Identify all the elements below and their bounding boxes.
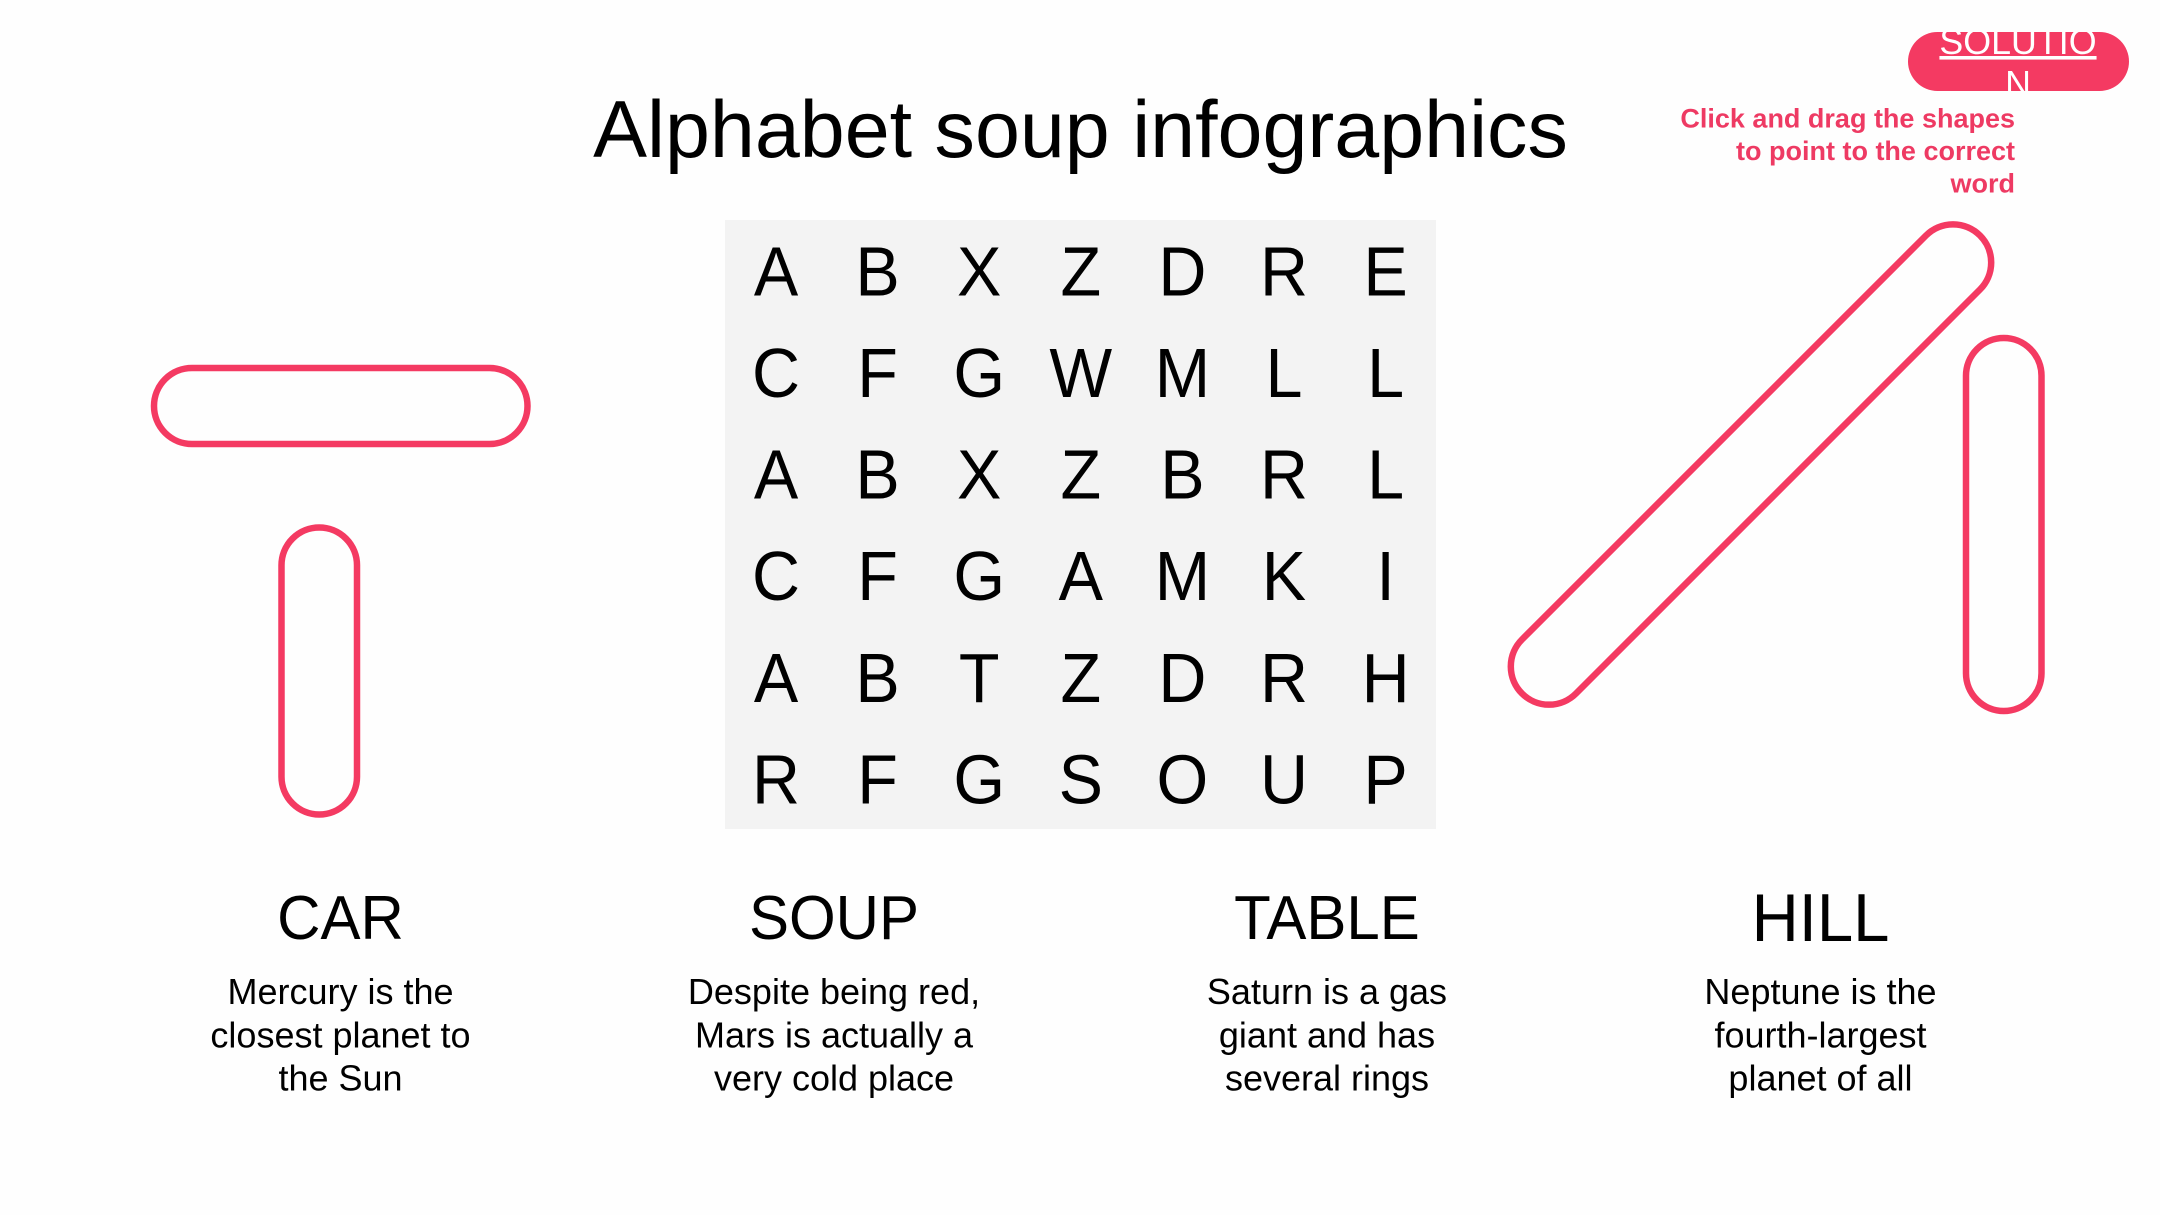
panel: HILL [1704,881,1937,1098]
grid row 1: E [1363,233,1408,311]
description: SOUP: Mars is actually a [695,1014,974,1055]
grid row 3: Z [1060,436,1101,514]
panel: letter grid [725,220,1436,829]
grid row 5 [754,639,1410,717]
grid row 5: Z [1060,639,1101,717]
grid row 4: A [1059,538,1103,616]
title: Alphabet soup infographics [593,85,1568,175]
grid row 1: R [1260,233,1308,311]
description: SOUP: Despite being red, [688,971,980,1012]
shape: vertical pill left [282,528,357,814]
grid row 3: B [1160,436,1205,514]
grid row 4: F [857,538,898,616]
instruction text: word [1950,168,2015,198]
shape: horizontal pill [154,368,528,444]
grid row 1: B [855,233,900,311]
grid row 1: X [957,233,1001,311]
description: HILL: planet of all [1728,1057,1913,1098]
description: HILL [1704,971,1937,1098]
grid row 5: D [1158,639,1206,717]
grid row 2: F [857,334,898,412]
grid row 3: R [1260,436,1308,514]
heading: TABLE: TABLE [1234,883,1420,952]
description: TABLE: giant and has [1219,1014,1435,1055]
grid row 2: L [1266,334,1302,412]
grid row 4: K [1262,538,1306,616]
grid row 3: L [1367,436,1404,514]
panel: SOUP [688,883,980,1098]
grid row 4 [752,538,1395,616]
heading: SOUP: SOUP [749,883,919,952]
description: HILL: fourth-largest [1714,1014,1927,1055]
grid row 6: G [953,741,1005,819]
instruction text: Click and drag the shapes [1680,104,2015,134]
grid row 6: R [752,741,800,819]
grid row 2 [752,334,1404,412]
grid row 6: S [1059,741,1103,819]
description: TABLE: several rings [1225,1057,1429,1098]
grid row 2: G [953,334,1005,412]
grid row 6: U [1260,741,1308,819]
grid row 3 [754,436,1404,514]
grid row 1: A [754,233,799,311]
description: CAR: the Sun [278,1057,403,1098]
description: SOUP: very cold place [714,1057,954,1098]
grid row 6: P [1363,741,1408,819]
grid row 5: T [959,639,1000,717]
grid row 5: H [1362,639,1410,717]
grid row 5: B [855,639,900,717]
description: TABLE: Saturn is a gas [1207,971,1447,1012]
grid row 3: B [855,436,900,514]
grid row 3: X [957,436,1001,514]
grid row 4: I [1376,538,1395,616]
grid row 1: D [1158,233,1206,311]
grid row 4: G [953,538,1005,616]
solution button [1908,32,2129,91]
solution button: N [2005,64,2031,104]
description: HILL: Neptune is the [1704,971,1937,1012]
grid row 2: C [752,334,800,412]
grid row 5: A [754,639,799,717]
grid row 6 [752,741,1408,819]
shape: vertical pill right [1966,338,2042,711]
grid row 2: W [1049,334,1113,412]
instruction text: to point to the correct [1736,136,2015,166]
panel: TABLE [1207,883,1447,1098]
grid row 3: A [754,436,799,514]
grid row 6: O [1157,741,1208,819]
shape: diagonal pill [1511,224,1991,705]
description: CAR: closest planet to [210,1014,471,1055]
instruction text [1680,104,2015,198]
panel: CAR [210,883,471,1098]
description: TABLE [1207,971,1447,1098]
description: SOUP [688,971,980,1098]
grid row 6: F [857,741,898,819]
grid row 2: M [1155,334,1210,412]
grid row 2: L [1367,334,1404,412]
solution button: SOLUTIO [1939,22,2097,62]
grid row 4: M [1155,538,1210,616]
description: CAR [210,971,471,1098]
grid row 5: R [1260,639,1308,717]
heading: CAR: CAR [277,883,404,952]
grid row 1 [754,233,1408,311]
grid row 4: C [752,538,800,616]
grid row 1: Z [1060,233,1101,311]
description: CAR: Mercury is the [227,971,454,1012]
heading: HILL: HILL [1752,881,1889,956]
